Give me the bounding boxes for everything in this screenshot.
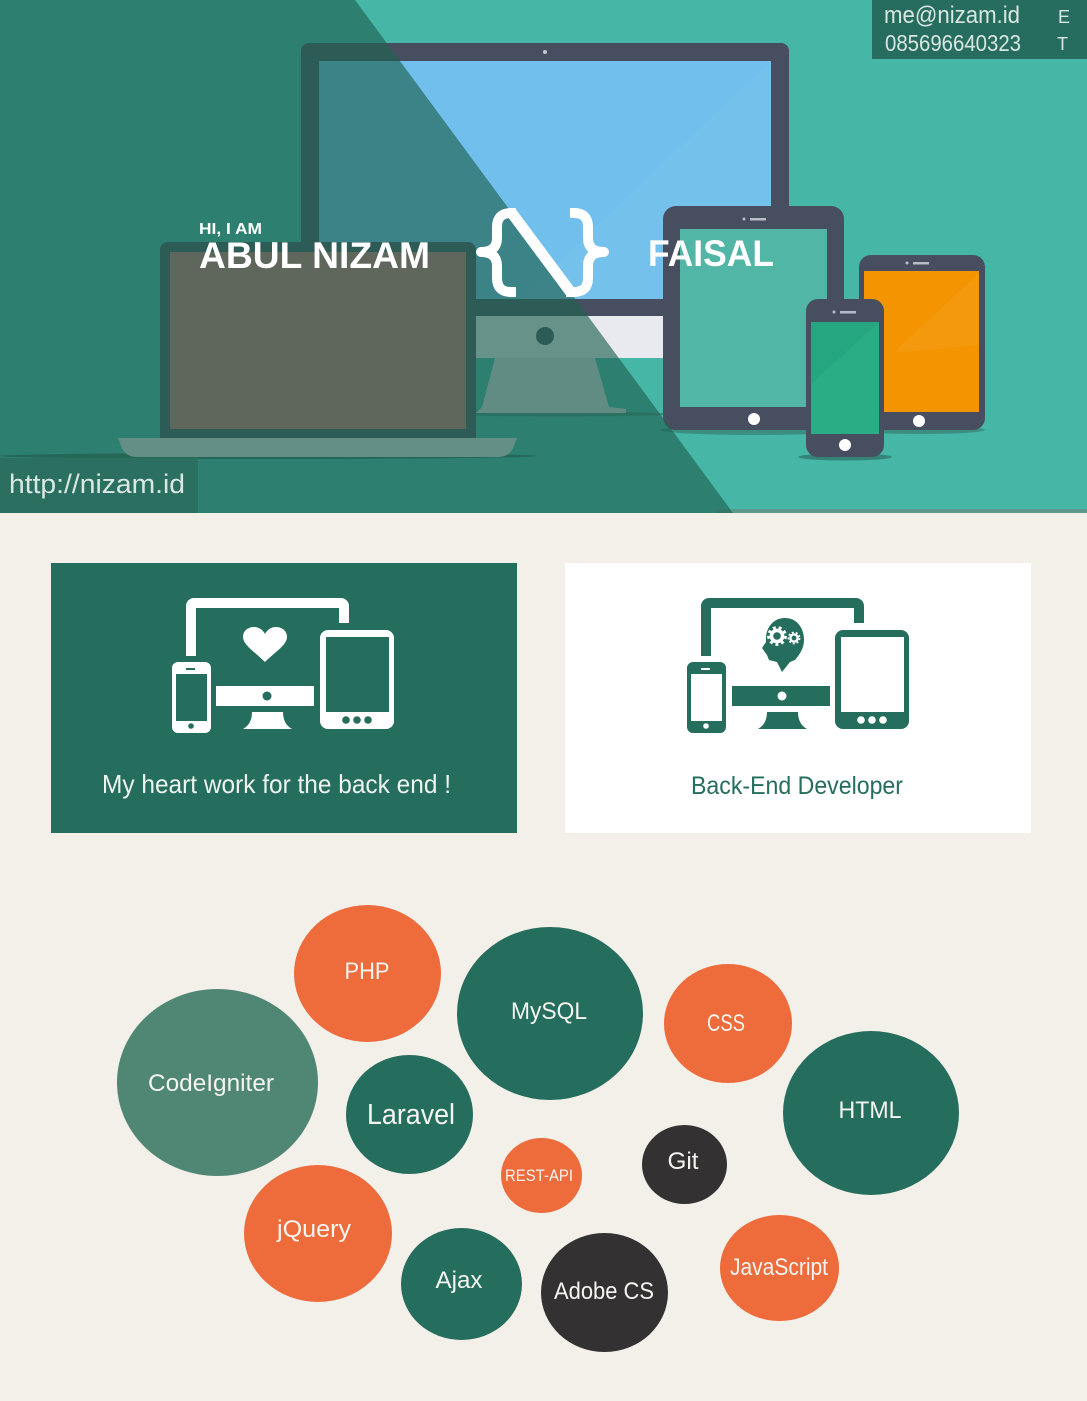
dark diagonal overlay: [0, 0, 733, 513]
device: laptop: [0, 242, 536, 459]
bubble: HTML: HTML: [838, 1097, 902, 1124]
bubble: jQuery: [244, 1165, 392, 1302]
bubble: Laravel: Laravel: [367, 1099, 455, 1131]
contact box: [872, 0, 1087, 59]
website link box: [0, 458, 198, 513]
bubble: Adobe CS: [541, 1233, 668, 1352]
website link box: http://nizam.id: [9, 469, 185, 499]
panel: back end heart card: [51, 563, 517, 833]
bubble: Ajax: Ajax: [436, 1267, 482, 1294]
title: greeting: HI, I AM: [199, 221, 262, 238]
bubble: CodeIgniter: CodeIgniter: [148, 1070, 274, 1097]
bubble: REST-API: REST-API: [505, 1166, 573, 1185]
bubble: MySQL: MySQL: [511, 998, 587, 1025]
bubble: PHP: PHP: [344, 958, 390, 985]
bubble: MySQL: [457, 927, 643, 1100]
bubble: REST-API: [501, 1138, 582, 1213]
device: large tablet: [660, 206, 850, 435]
device: phone: [798, 299, 892, 460]
caption: Back-End Developer: [691, 772, 903, 800]
bubble: CSS: [664, 964, 792, 1083]
bubble: JavaScript: JavaScript: [730, 1254, 828, 1281]
bubble: CodeIgniter: [117, 989, 318, 1176]
contact box: T: [1057, 34, 1068, 54]
bubble: HTML: [783, 1031, 959, 1195]
title: last name: FAISAL: [648, 233, 774, 274]
bubble: Laravel: [346, 1055, 473, 1174]
panel: back-end developer card: [565, 563, 1031, 833]
bubble: Git: [642, 1125, 727, 1204]
bubble: CSS: CSS: [707, 1010, 745, 1037]
bubble: Git: Git: [668, 1148, 699, 1175]
device: small orange tablet: [855, 255, 985, 434]
logo: curly braces with slash: [481, 212, 604, 294]
title: first name: ABUL NIZAM: [199, 235, 430, 276]
contact box: E: [1058, 7, 1070, 27]
hero banner: [0, 0, 1087, 513]
contact box: me@nizam.id: [884, 2, 1020, 29]
bubble chart: skills: [117, 905, 959, 1352]
bubble: PHP: [294, 905, 441, 1042]
bubble: Adobe CS: Adobe CS: [554, 1278, 654, 1305]
bubble: JavaScript: [720, 1215, 839, 1321]
device: desktop monitor: [301, 43, 789, 416]
bubble: jQuery: jQuery: [276, 1216, 351, 1243]
icon: devices with thinking head: [687, 598, 909, 733]
bubble: Ajax: [401, 1228, 522, 1340]
caption: My heart work for the back end !: [102, 769, 451, 799]
icon: devices with heart: [172, 598, 394, 733]
contact box: 085696640323: [885, 30, 1021, 56]
